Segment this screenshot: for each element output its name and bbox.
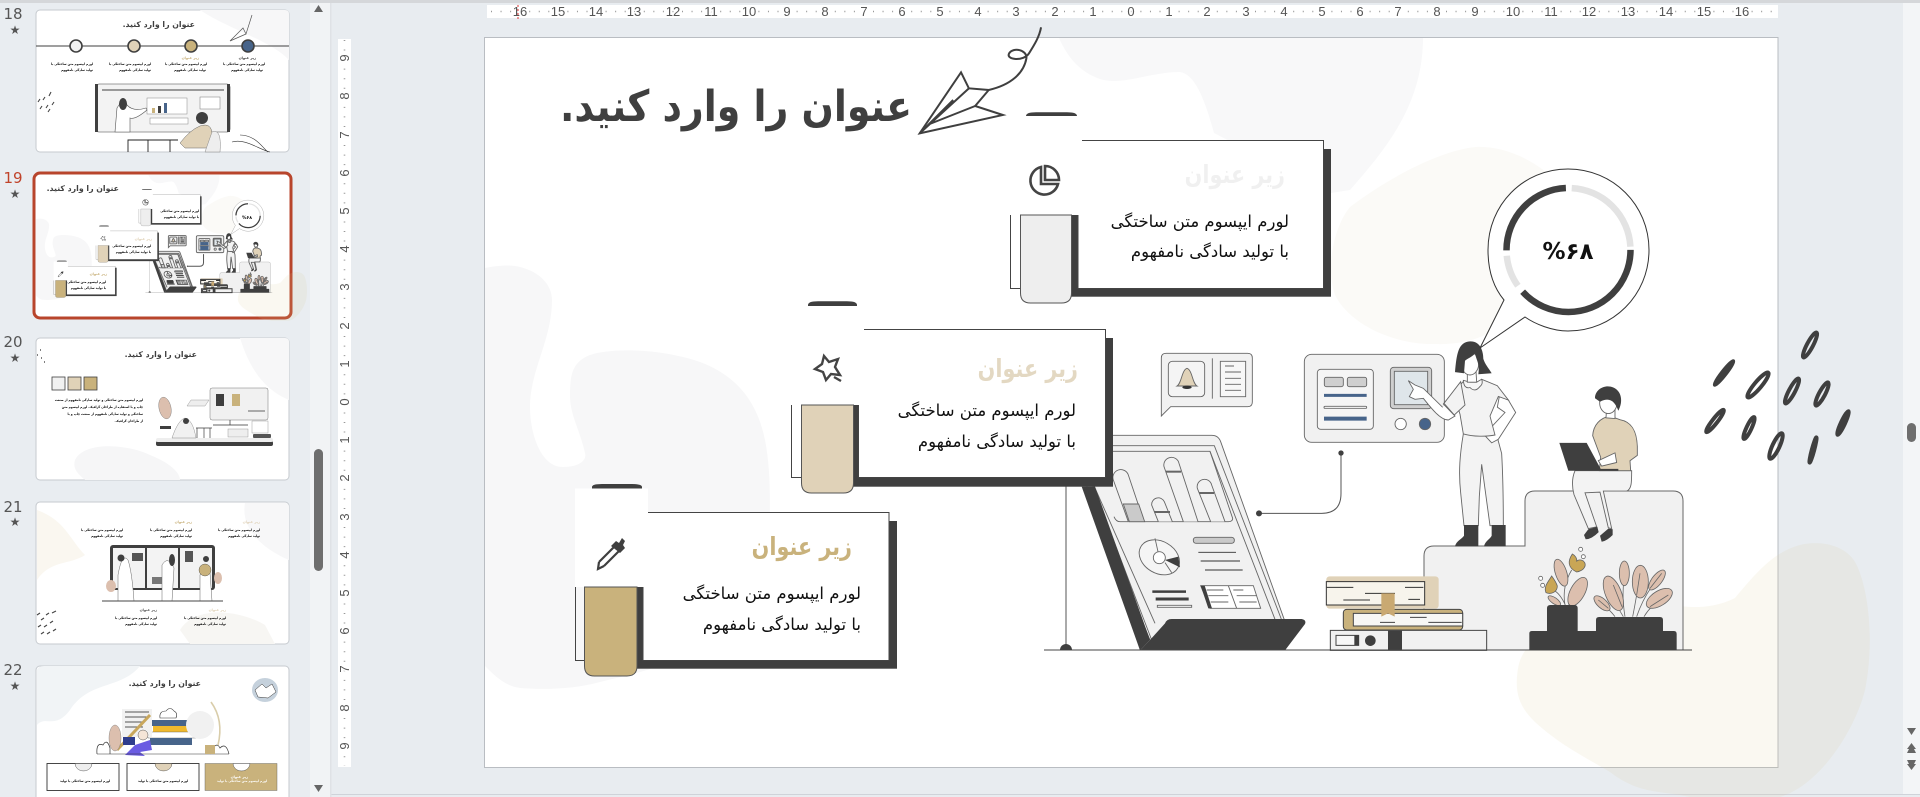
horizontal ruler: 13 — [627, 4, 641, 19]
vertical ruler: 5 — [337, 207, 352, 215]
vertical ruler: 4 — [337, 551, 352, 559]
horizontal ruler: 11 — [704, 4, 718, 19]
thumbnail: slide 21: تولید سادگی نامفهوم — [160, 534, 192, 538]
thumbnail: slide 21: تولید سادگی نامفهوم — [91, 534, 123, 538]
potted plants — [1529, 547, 1677, 650]
card 1 text: با تولید سادگی نامفهوم — [1131, 242, 1289, 262]
vertical ruler: 0 — [337, 398, 352, 406]
card 2 shapes — [791, 301, 1113, 493]
vertical ruler: 9 — [337, 742, 352, 750]
interface panel — [1304, 354, 1444, 442]
thumbnail: slide 21: زیر عنوان — [175, 520, 192, 524]
horizontal ruler: 9 — [783, 4, 791, 19]
thumbnail: slide 18 timeline: لورم ایپسوم متن ساختگی با — [109, 62, 151, 66]
horizontal ruler: 4 — [974, 4, 982, 19]
thumbnail: slide 20: عنوان را وارد کنید. — [125, 350, 197, 359]
vertical ruler: 2 — [337, 474, 352, 482]
horizontal ruler: 8 — [821, 4, 829, 19]
thumbnail: slide 21 — [36, 502, 289, 644]
panel: cards — [575, 112, 1331, 676]
thumbnail: slide 21: تولید سادگی نامفهوم — [228, 534, 260, 538]
horizontal ruler: 13 — [1621, 4, 1635, 19]
card 1 text — [1111, 161, 1289, 262]
thumbnail: slide 19 selected: لورم ایپسوم متن ساختگی — [112, 244, 151, 248]
thumbnail: slide 19 selected: با تولید سادگی نامفهوم — [116, 250, 151, 254]
vertical ruler: 1 — [337, 360, 352, 368]
laptop dashboard — [1073, 435, 1305, 650]
horizontal ruler: 2 — [1051, 4, 1059, 19]
slide number 21: ★ — [10, 515, 20, 529]
thumbnail: slide 18 timeline: تولید سادگی نامفهوم — [174, 68, 206, 72]
ground line — [1044, 480, 1692, 650]
slide number 20 — [3, 333, 23, 365]
thumbnail: slide 19 selected: زیر عنوان — [135, 237, 152, 241]
horizontal ruler: 16 — [513, 4, 527, 19]
slide number 19 — [3, 169, 23, 201]
raindrop decoration — [1704, 331, 1850, 463]
thumbnail: slide 19 selected: %۶۸ — [242, 215, 252, 221]
thumbnail: slide 19 selected: لورم ایپسوم متن ساختگی — [160, 209, 199, 213]
card 2 text: لورم ایپسوم متن ساختگی — [898, 401, 1076, 421]
thumbnail: slide 19 selected — [34, 173, 307, 321]
horizontal ruler: 15 — [551, 4, 565, 19]
horizontal ruler: 7 — [1394, 4, 1402, 19]
thumbnail: slide 18 timeline: زیر عنوان — [239, 56, 256, 60]
slide number 20: ★ — [10, 351, 20, 365]
man with laptop — [1559, 386, 1637, 542]
horizontal ruler: 5 — [1318, 4, 1326, 19]
speech bubble with progress ring — [1480, 169, 1649, 348]
horizontal ruler: 0 — [1127, 4, 1135, 19]
card 2 text: زیر عنوان — [978, 355, 1078, 384]
vertical ruler: 3 — [337, 513, 352, 521]
thumbnail: slide 22: لورم ایپسوم متن ساختگی با تولید — [217, 779, 267, 783]
vertical ruler: 7 — [337, 131, 352, 139]
card 3 text: با تولید سادگی نامفهوم — [703, 615, 861, 635]
horizontal ruler: 14 — [1659, 4, 1673, 19]
thumbnail: slide 19 selected: زیر عنوان — [90, 272, 107, 276]
vertical ruler: 6 — [337, 627, 352, 635]
slide number 20: 20 — [3, 333, 23, 351]
woman pointing arm — [1408, 381, 1465, 420]
horizontal ruler: 9 — [1471, 4, 1479, 19]
notification speech bubble — [1161, 353, 1252, 416]
vertical ruler: 8 — [337, 92, 352, 100]
thumbnail: slide 18 timeline: لورم ایپسوم متن ساختگی با — [223, 62, 265, 66]
thumbnail: slide 21: لورم ایپسوم متن ساختگی با — [218, 528, 260, 532]
steps — [1424, 491, 1683, 650]
slide number 19: ★ — [10, 187, 20, 201]
thumbnail: slide 21: لورم ایپسوم متن ساختگی با — [81, 528, 123, 532]
thumbnail: slide 19 selected: با تولید سادگی نامفهوم — [71, 286, 106, 290]
thumbnail: slide 21: زیر عنوان — [140, 608, 157, 612]
slide number 22: 22 — [3, 661, 23, 679]
thumbnail: slide 22 — [36, 666, 289, 797]
thumbnail: slide 18 timeline: عنوان را وارد کنید. — [123, 20, 195, 29]
vertical ruler: 5 — [337, 589, 352, 597]
thumbnail: slide 20 — [36, 338, 289, 480]
slide number 19: 19 — [3, 169, 23, 187]
horizontal ruler: 3 — [1012, 4, 1020, 19]
card 1 text: زیر عنوان — [1185, 161, 1285, 190]
vertical ruler: 2 — [337, 322, 352, 330]
horizontal ruler: 6 — [898, 4, 906, 19]
illustration: workplace scene — [1044, 169, 1692, 650]
thumbnail: slide 19 selected: عنوان را وارد کنید. — [47, 184, 119, 193]
horizontal ruler: 11 — [1544, 4, 1558, 19]
thumbnail: slide 18 timeline: لورم ایپسوم متن ساختگی با — [51, 62, 93, 66]
card 3 text: لورم ایپسوم متن ساختگی — [683, 584, 861, 604]
thumbnail scrollbar — [310, 3, 332, 797]
slide number 18: ★ — [10, 23, 20, 37]
vertical ruler: 9 — [337, 54, 352, 62]
horizontal ruler: 1 — [1089, 4, 1097, 19]
connector line — [1256, 450, 1344, 516]
thumbnail: slide 20: ساختگی و تولید سادگی نامفهوم از صنعت چاپ و با — [68, 412, 143, 416]
book stack — [1326, 576, 1487, 650]
horizontal ruler: 3 — [1242, 4, 1250, 19]
thumbnail: slide 19 selected: لورم ایپسوم متن ساختگی — [67, 280, 106, 284]
vertical ruler: 4 — [337, 245, 352, 253]
vertical ruler: 7 — [337, 665, 352, 673]
thumbnail: slide 21: زیر عنوان — [243, 520, 260, 524]
thumbnail: slide 21: لورم ایپسوم متن ساختگی با — [115, 616, 157, 620]
thumbnail: slide 18 timeline: زیر عنوان — [182, 56, 199, 60]
thumbnail: slide 20: لورم ایپسوم متن ساختگی و تولید سادگی نامفهوم از صنعت — [55, 398, 143, 402]
card 3 shapes — [575, 484, 897, 676]
thumbnail: slide 22: لورم ایپسوم متن ساختگی با تولید — [60, 779, 110, 783]
card 3 text — [683, 533, 861, 635]
slide number 22: ★ — [10, 679, 20, 693]
card 3 text: زیر عنوان — [752, 533, 852, 562]
card 1 shapes — [1010, 112, 1331, 303]
thumbnail: slide 21: لورم ایپسوم متن ساختگی با — [150, 528, 192, 532]
card 2 text: با تولید سادگی نامفهوم — [918, 432, 1076, 452]
thumbnail: slide 18 timeline: تولید سادگی نامفهوم — [231, 68, 263, 72]
thumbnail: slide 18 timeline: لورم ایپسوم متن ساختگی با — [165, 62, 207, 66]
vertical ruler: 8 — [337, 704, 352, 712]
vertical ruler: 3 — [337, 283, 352, 291]
progress percent label: %۶۸ — [1542, 239, 1594, 265]
title: عنوان را وارد کنید. — [560, 81, 912, 132]
thumbnail: slide 18 timeline: تولید سادگی نامفهوم — [61, 68, 93, 72]
thumbnail: slide 20: از طراحان گرافیک. — [115, 419, 143, 423]
card 1 text: لورم ایپسوم متن ساختگی — [1111, 212, 1289, 232]
thumbnail: slide 22: لورم ایپسوم متن ساختگی با تولید — [138, 779, 188, 783]
horizontal ruler — [487, 4, 1778, 19]
vertical ruler: 1 — [337, 436, 352, 444]
horizontal ruler: 2 — [1203, 4, 1211, 19]
panel: slide thumbnails sidebar — [0, 3, 310, 797]
slide number 18: 18 — [3, 5, 23, 23]
paper plane icon — [920, 27, 1041, 133]
slide number 21 — [3, 498, 23, 529]
thumbnail: slide 21: تولید سادگی نامفهوم — [194, 622, 226, 626]
thumbnail: slide 19 selected: با تولید سادگی نامفهوم — [164, 215, 199, 219]
horizontal ruler: 10 — [742, 4, 756, 19]
vertical ruler — [337, 39, 352, 767]
thumbnail: slide 20: چاپ و با استفاده از طراحان گرافیک. لورم ایپسوم متن — [62, 405, 143, 409]
thumbnail: slide 18 timeline: تولید سادگی نامفهوم — [119, 68, 151, 72]
horizontal ruler: 7 — [860, 4, 868, 19]
horizontal ruler: 12 — [666, 4, 680, 19]
vertical ruler: 6 — [337, 169, 352, 177]
horizontal ruler: 6 — [1356, 4, 1364, 19]
woman figure — [1453, 341, 1516, 546]
panel: main slide page — [484, 38, 1778, 768]
horizontal ruler: 16 — [1735, 4, 1749, 19]
thumbnail: slide 18 timeline — [36, 10, 289, 152]
horizontal ruler: 1 — [1165, 4, 1173, 19]
horizontal ruler: 15 — [1697, 4, 1711, 19]
thumbnail: slide 21: تولید سادگی نامفهوم — [125, 622, 157, 626]
thumbnail: slide 22: عنوان را وارد کنید. — [129, 679, 201, 688]
horizontal ruler: 14 — [589, 4, 603, 19]
slide number 21: 21 — [3, 498, 23, 516]
horizontal ruler: 8 — [1433, 4, 1441, 19]
slide number 18 — [3, 5, 23, 37]
horizontal ruler: 10 — [1506, 4, 1520, 19]
card 2 text — [898, 355, 1078, 452]
thumbnail: slide 21: لورم ایپسوم متن ساختگی با — [184, 616, 226, 620]
horizontal ruler: 12 — [1582, 4, 1596, 19]
slide number 22 — [3, 661, 23, 693]
background blobs — [485, 38, 1870, 797]
horizontal ruler: 4 — [1280, 4, 1288, 19]
thumbnail: slide 21: زیر عنوان — [209, 608, 226, 612]
horizontal ruler: 5 — [936, 4, 944, 19]
thumbnail: slide 22: زیر عنوان — [231, 775, 248, 779]
main vertical scrollbar — [1903, 3, 1920, 794]
